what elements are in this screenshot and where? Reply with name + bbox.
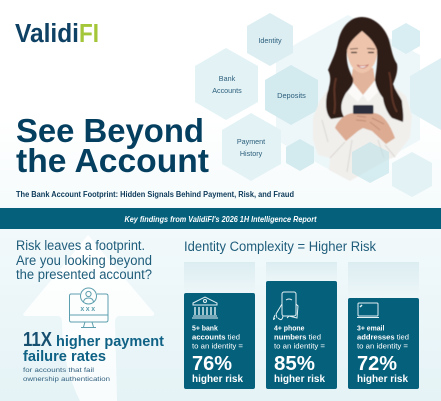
card text xyxy=(192,326,243,385)
card: bank accounts xyxy=(184,262,255,389)
subtitle: The Bank Account Footprint: Hidden Signals Behind Payment, Risk, and Fraud xyxy=(16,190,294,199)
hexagon: Identity: Identity xyxy=(258,36,282,45)
card text: 76% xyxy=(192,353,232,375)
hexagon: Bank Accounts xyxy=(195,48,258,120)
neck and chest xyxy=(351,68,375,95)
stat: 11X higher payment failure rates: ownership authentication xyxy=(23,376,110,383)
hexagon: Deposits: Deposits xyxy=(277,91,306,100)
card: phone numbers xyxy=(266,262,337,389)
icon: hand holding phone xyxy=(274,292,298,320)
hexagon cluster xyxy=(276,15,441,197)
icon: monitor with user: xxx xyxy=(80,306,97,313)
hair xyxy=(326,17,403,122)
hexagon: Identity xyxy=(247,13,293,66)
card text: 5+ bank xyxy=(192,326,218,332)
banner: Key findings from ValidiFI's 2026 1H Intelligence Report xyxy=(124,215,317,224)
stat: 11X higher payment failure rates: 11X xyxy=(23,329,53,351)
hexagon: Bank Accounts: Accounts xyxy=(212,86,242,95)
card text: addresses tied xyxy=(357,334,409,342)
hexagon: Bank Accounts: Bank xyxy=(219,74,236,83)
card text: 72% xyxy=(357,353,397,375)
stat: 11X higher payment failure rates: for accounts that fail xyxy=(23,367,95,374)
hair highlights xyxy=(334,72,397,114)
card text: to an identity = xyxy=(357,344,408,350)
shirt xyxy=(313,82,412,181)
hexagon: Payment History: History xyxy=(240,149,263,158)
title: the Account xyxy=(16,143,209,180)
heading: risk footprint: Risk leaves a footprint. xyxy=(16,238,145,253)
card text: numbers tied xyxy=(274,334,321,342)
card text: higher risk xyxy=(192,374,243,385)
hands xyxy=(335,113,395,144)
stat: 11X higher payment failure rates: failure rates xyxy=(23,349,106,365)
face xyxy=(347,31,377,73)
banner xyxy=(0,208,441,229)
card text xyxy=(357,326,409,385)
icon: monitor with user xyxy=(70,288,108,328)
logo: FI xyxy=(79,20,99,48)
large background arrow xyxy=(23,235,154,401)
stat: 11X higher payment failure rates: higher payment xyxy=(56,334,164,350)
heading: identity complexity: Identity Complexity = Higher Risk xyxy=(184,239,376,254)
collar xyxy=(346,80,380,102)
title xyxy=(16,113,209,180)
card text xyxy=(274,326,325,385)
card text: to an identity = xyxy=(192,344,243,350)
card text: 85% xyxy=(274,353,315,375)
icon: bank xyxy=(192,297,218,318)
hexagon: Payment History xyxy=(222,113,281,181)
logo: Validi xyxy=(15,20,79,48)
card text: higher risk xyxy=(357,374,408,385)
icon: laptop xyxy=(357,303,379,318)
phone xyxy=(353,105,374,114)
card text: accounts tied xyxy=(192,334,240,342)
hexagon: Deposits xyxy=(265,65,318,125)
card: email addresses xyxy=(348,262,419,389)
card text: 3+ email xyxy=(357,326,384,332)
card text: 4+ phone xyxy=(274,326,305,332)
photo: woman with phone xyxy=(313,17,412,181)
title: See Beyond xyxy=(16,113,204,150)
stat: 11X higher payment failure rates xyxy=(23,329,164,383)
card text: higher risk xyxy=(274,374,325,385)
translucent hexagon over photo xyxy=(352,142,389,183)
heading: risk footprint: Are you looking beyond xyxy=(16,253,152,268)
heading: risk footprint xyxy=(16,238,152,282)
hexagon: Payment History: Payment xyxy=(237,137,265,146)
heading: risk footprint: the presented account? xyxy=(16,267,152,282)
card text: to an identity = xyxy=(274,344,325,350)
shirt folds xyxy=(322,120,395,172)
